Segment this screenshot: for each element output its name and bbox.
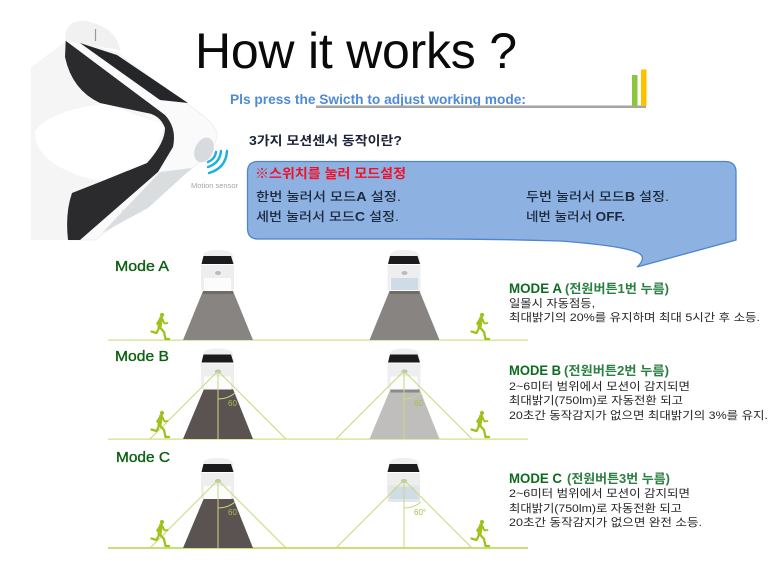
description: Mode B: 2~6미터 범위에서 모션이 감지되면: [509, 380, 690, 393]
motion sensor caption: Motion sensor: [191, 181, 239, 190]
product image: solar motion sensor light: [31, 21, 218, 240]
description: Mode A: (전원버튼1번 누름): [565, 282, 669, 296]
label: Mode A: Mode A: [115, 258, 169, 275]
description: Mode A: 최대밝기의 20%를 유지하며 최대 5시간 후 소등.: [509, 310, 760, 324]
label: Mode C: Mode C: [116, 449, 170, 466]
label: Mode B: Mode B: [115, 348, 169, 365]
description: Mode C: 최대밝기(750lm)로 자동전환 되고: [509, 502, 682, 515]
description: Mode B: 최대밝기(750lm)로 자동전환 되고: [509, 394, 683, 407]
press four times: 네번 눌러서 OFF.: [526, 210, 625, 224]
description: Mode C: MODE C: [509, 470, 562, 486]
description: Mode C: (전원버튼3번 누름): [567, 472, 670, 486]
description: Mode B: [509, 362, 768, 422]
description: Mode B: MODE B: [509, 362, 561, 378]
diagram: Mode B: 60: [228, 399, 237, 408]
icon: motion sensor waves: [208, 151, 227, 173]
bubble heading: ※스위치를 눌러 모드설정: [255, 166, 406, 181]
subtitle: Pls press the Swicth to adjust working mode:: [230, 92, 526, 107]
description: Mode B: (전원버튼2번 누름): [564, 364, 669, 378]
diagram: Mode C: [108, 458, 528, 549]
press once: 한번 눌러서 모드 A 설정.: [256, 190, 401, 204]
title: How it works ?: [195, 23, 517, 79]
speech bubble callout: [248, 162, 736, 267]
diagram: Mode B: 60: [414, 399, 423, 408]
diagram: Mode C: 60°: [414, 508, 426, 517]
press twice: 두번 눌러서 모드 B 설정.: [526, 190, 669, 204]
description: Mode C: 20초간 동작감지가 없으면 완전 소등.: [509, 516, 702, 529]
diagram: Mode C: 60: [228, 508, 237, 517]
description: Mode B: 20초간 동작감지가 없으면 최대밝기의 3%를 유지.: [509, 409, 768, 422]
description: Mode A: 일몰시 자동점등,: [509, 296, 595, 310]
description: Mode A: MODE A: [509, 280, 562, 296]
decorative underline with bars: [316, 70, 646, 108]
press three times: 세번 눌러서 모드 C 설정.: [256, 210, 399, 224]
diagram: Mode A: [108, 250, 528, 341]
description: Mode C: [509, 470, 702, 529]
diagram: Mode B: [108, 348, 528, 440]
question heading: 3가지 모션센서 동작이란?: [249, 133, 402, 148]
description: Mode C: 2~6미터 범위에서 모션이 감지되면: [509, 487, 690, 500]
description: Mode A: [509, 280, 760, 324]
